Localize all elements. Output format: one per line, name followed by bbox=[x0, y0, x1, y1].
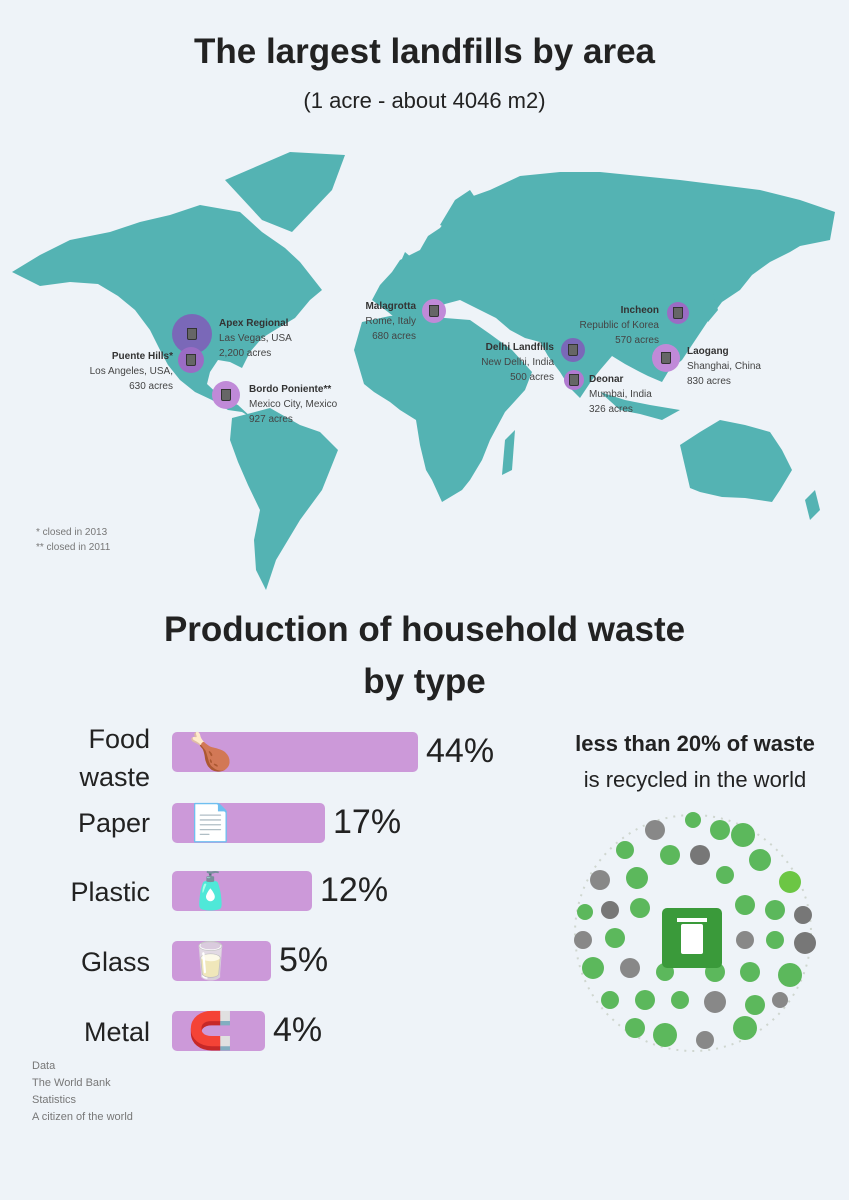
label: Delhi: New Delhi, India bbox=[481, 357, 554, 368]
label: Deonar: 326 acres bbox=[589, 404, 633, 415]
label: Bordo: Bordo Poniente** bbox=[249, 384, 331, 395]
label: Incheon bbox=[580, 305, 659, 346]
label: Bordo bbox=[249, 384, 337, 425]
label: Apex bbox=[219, 318, 292, 359]
label: Puente: Los Angeles, USA, bbox=[90, 366, 173, 377]
marker: Laogang bbox=[652, 344, 680, 372]
bar chart: 🥛 bbox=[188, 940, 233, 981]
footnote: * closed in 2013 bbox=[36, 527, 107, 538]
marker: Apex Regional bbox=[172, 314, 212, 354]
label: Apex: Apex Regional bbox=[219, 318, 288, 329]
heading: household waste: Production of household waste bbox=[164, 610, 685, 649]
label: Malagrotta: Rome, Italy bbox=[365, 316, 416, 327]
label: Bordo: 927 acres bbox=[249, 414, 293, 425]
label: Delhi: 500 acres bbox=[510, 372, 554, 383]
sources: Data bbox=[32, 1060, 55, 1072]
label: Laogang: 830 acres bbox=[687, 376, 731, 387]
world map bbox=[12, 152, 835, 590]
sources: A citizen of the world bbox=[32, 1111, 133, 1123]
label: Deonar: Mumbai, India bbox=[589, 389, 652, 400]
footnote: ** closed in 2011 bbox=[36, 542, 110, 553]
recycled callout: less than 20% of waste bbox=[575, 731, 815, 756]
marker: Incheon bbox=[667, 302, 689, 324]
label: Delhi bbox=[481, 342, 554, 383]
title: The largest landfills by area bbox=[194, 32, 655, 71]
heading: household waste: by type bbox=[363, 662, 486, 701]
bar chart: 4% bbox=[273, 1011, 322, 1049]
label: Puente: 630 acres bbox=[129, 381, 173, 392]
label: Incheon: Republic of Korea bbox=[580, 320, 659, 331]
label: Puente bbox=[90, 351, 173, 392]
bar chart: waste bbox=[79, 762, 150, 792]
bar chart: 17% bbox=[333, 803, 401, 841]
label: Apex: 2,200 acres bbox=[219, 348, 271, 359]
bar chart: 📄 bbox=[188, 802, 233, 843]
eco icon circle bbox=[574, 812, 816, 1052]
label: Laogang bbox=[687, 346, 761, 387]
recycled callout bbox=[575, 731, 815, 792]
sources: The World Bank bbox=[32, 1077, 111, 1089]
bar chart: 🧴 bbox=[188, 870, 233, 911]
label: Laogang: Shanghai, China bbox=[687, 361, 761, 372]
marker: Puente Hills bbox=[178, 347, 204, 373]
label: Deonar bbox=[589, 374, 652, 415]
label: Incheon: 570 acres bbox=[615, 335, 659, 346]
subtitle: (1 acre - about 4046 m2) bbox=[303, 88, 546, 113]
label: Puente: Puente Hills* bbox=[112, 351, 173, 362]
marker: Malagrotta bbox=[422, 299, 446, 323]
marker: Deonar bbox=[564, 370, 584, 390]
central trash icon bbox=[662, 908, 722, 968]
bar chart bbox=[70, 724, 494, 1051]
marker: Delhi bbox=[561, 338, 585, 362]
recycled callout: is recycled in the world bbox=[584, 767, 806, 792]
bar chart: Paper bbox=[78, 808, 150, 838]
bar chart: 5% bbox=[279, 941, 328, 979]
label: Apex: Las Vegas, USA bbox=[219, 333, 292, 344]
bar chart: 🍗 bbox=[188, 731, 233, 772]
label: Malagrotta bbox=[365, 301, 416, 342]
bar chart: 12% bbox=[320, 871, 388, 909]
label: Malagrotta: Malagrotta bbox=[365, 301, 416, 312]
sources: Statistics bbox=[32, 1094, 76, 1106]
bar chart: Glass bbox=[81, 947, 150, 977]
bar chart: 44% bbox=[426, 732, 494, 770]
label: Malagrotta: 680 acres bbox=[372, 331, 416, 342]
bar chart: 🧲 bbox=[188, 1010, 233, 1051]
label: Incheon: Incheon bbox=[621, 305, 659, 316]
marker: Bordo Poniente bbox=[212, 381, 240, 409]
label: Deonar: Deonar bbox=[589, 374, 623, 385]
label: Bordo: Mexico City, Mexico bbox=[249, 399, 337, 410]
label: Laogang: Laogang bbox=[687, 346, 729, 357]
bar chart: Plastic bbox=[70, 877, 150, 907]
bar chart: Food bbox=[88, 724, 150, 754]
footnote bbox=[36, 527, 110, 553]
label: Delhi: Delhi Landfills bbox=[486, 342, 554, 353]
heading: household waste bbox=[164, 610, 685, 701]
bar chart: Metal bbox=[84, 1017, 150, 1047]
sources bbox=[32, 1060, 133, 1123]
